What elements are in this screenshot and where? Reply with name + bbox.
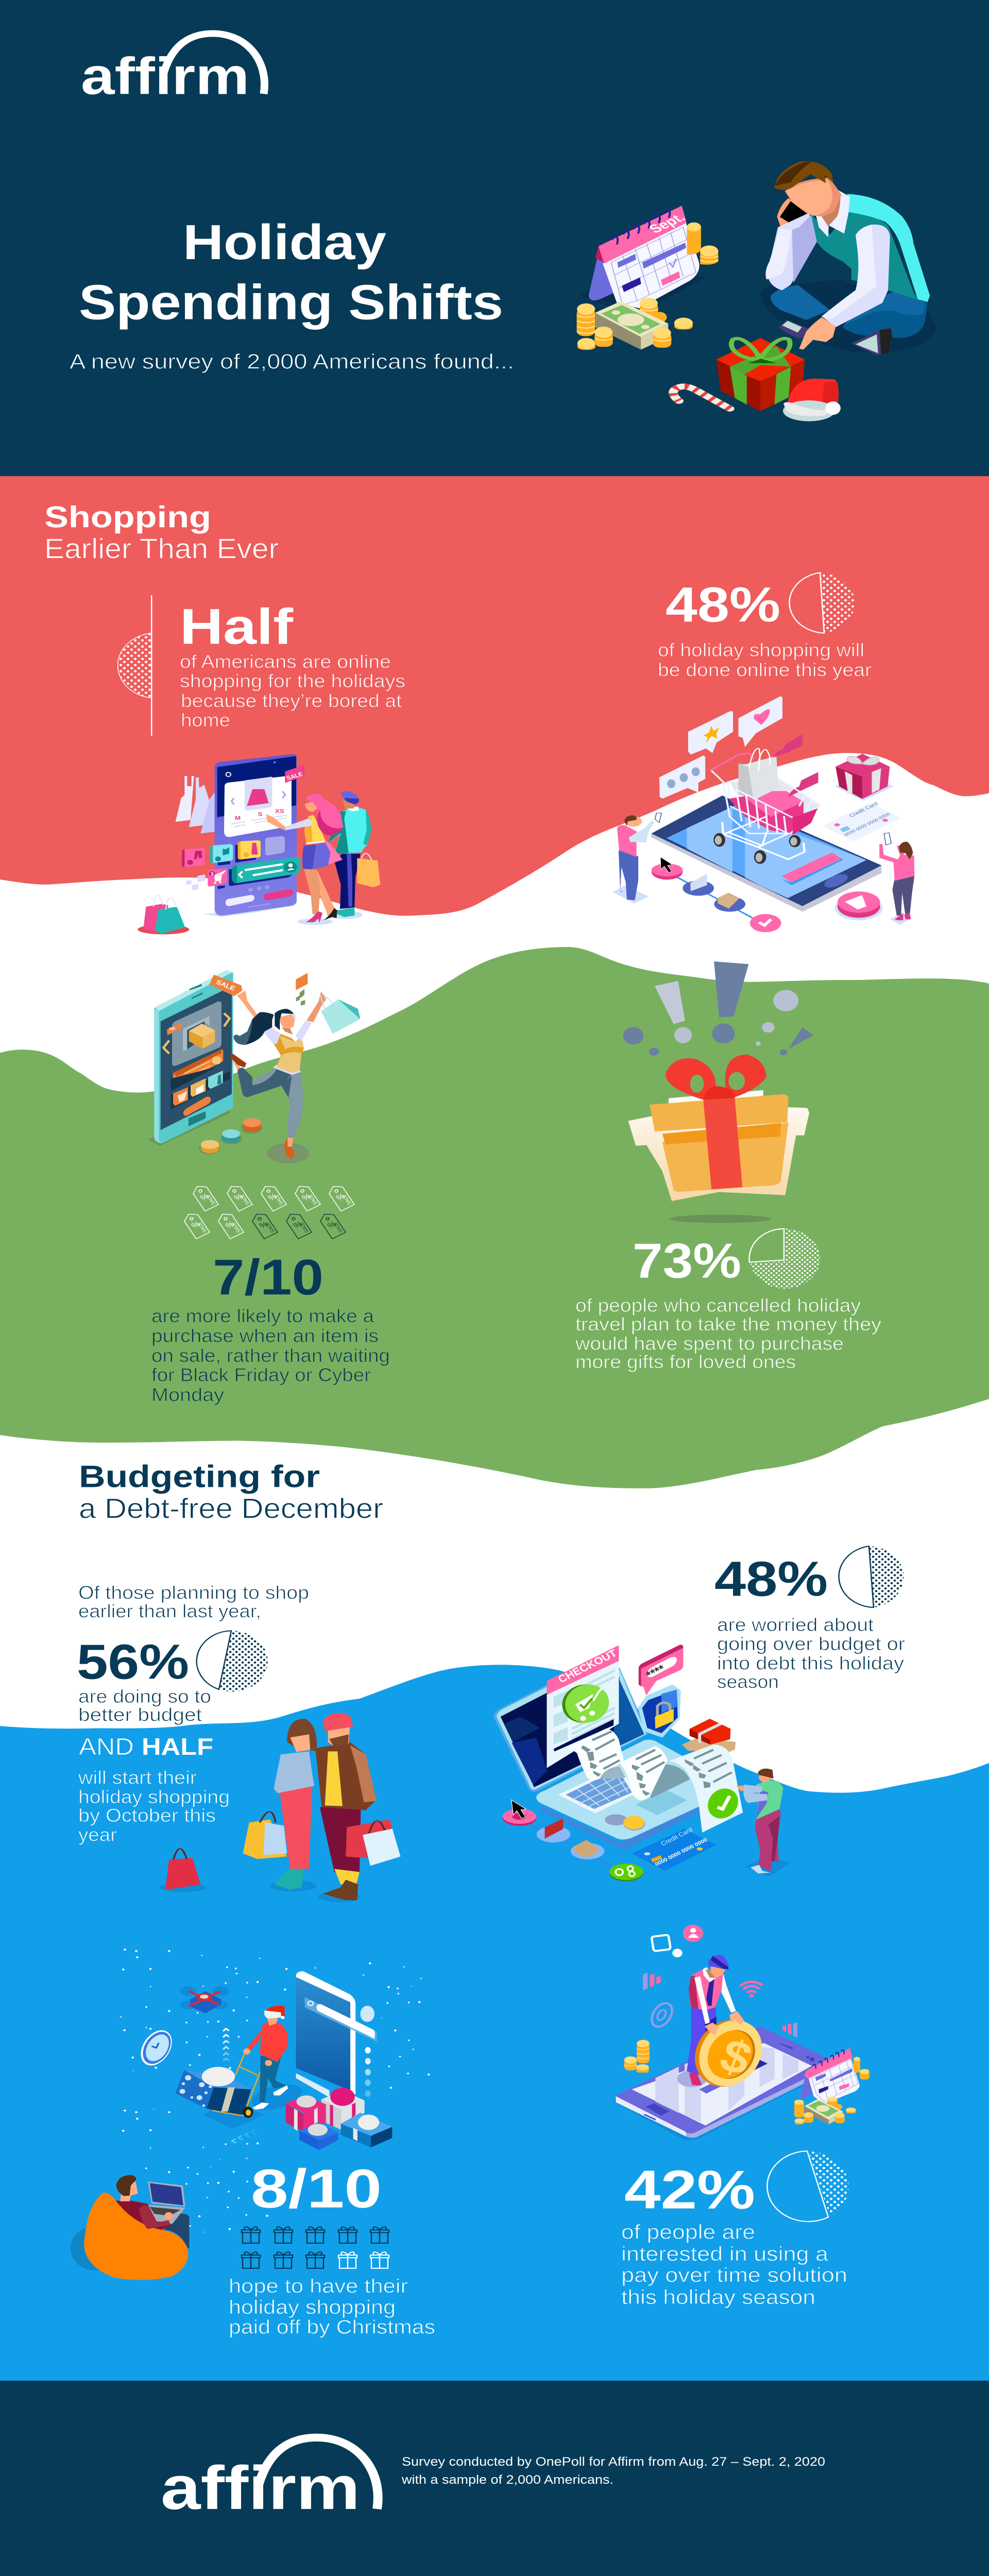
and half heading: AND [79, 1733, 134, 1760]
person in bean bag [71, 2175, 189, 2280]
header background [0, 0, 989, 476]
gift pile [286, 2088, 392, 2150]
clock [135, 2026, 178, 2070]
section heading: budgeting [79, 1459, 383, 1524]
48 percent text: be done online this year [658, 660, 872, 681]
section heading: shopping: Earlier Than Ever [44, 533, 279, 564]
sale tags: seven of ten: % [258, 1219, 270, 1230]
half text: of Americans are online [180, 652, 391, 672]
section heading: budgeting: a Debt-free December [79, 1493, 383, 1524]
73 percent text: more gifts for loved ones [575, 1352, 796, 1372]
section heading: shopping: Shopping [44, 501, 211, 534]
sale tags: seven of ten: SALE [298, 1222, 310, 1233]
woman shopper [266, 794, 343, 923]
48 percent text: are worried about [717, 1615, 874, 1635]
sale tags: seven of ten [182, 1183, 354, 1239]
and half stat [78, 1733, 230, 1845]
white wave [0, 753, 989, 1807]
calendar: Sept. [645, 211, 689, 235]
48 percent text [658, 640, 872, 681]
man with hand truck [175, 2006, 302, 2129]
man shopper [328, 791, 380, 917]
cursor, nodes and card [503, 1800, 717, 1882]
man shoes [779, 320, 892, 355]
credit card: Credit Card [848, 801, 879, 819]
8/10 text [229, 2275, 435, 2338]
title [79, 215, 503, 330]
and half text: by October this [78, 1806, 216, 1826]
and half text: holiday shopping [78, 1787, 230, 1807]
and half heading: HALF [142, 1733, 213, 1760]
man sleeves [765, 213, 890, 327]
calendar [579, 206, 709, 308]
42 percent text: of people are [621, 2221, 755, 2244]
8/10 stat [229, 2159, 435, 2338]
73 percent text: would have spent to purchase [575, 1334, 844, 1354]
56 percent text: better budget [78, 1705, 202, 1725]
app phone: M [235, 815, 241, 821]
man with phone [612, 813, 661, 903]
subtitle: A new survey of 2,000 Americans found... [70, 350, 514, 374]
password bubble and shield: **** [643, 1662, 668, 1681]
73 percent number: 73% [633, 1233, 741, 1289]
app phone [203, 754, 304, 917]
illustration: man moving gifts with phone and drone [71, 1948, 430, 2280]
73 percent stat [575, 1229, 881, 1372]
sale tags: seven of ten: % [232, 1192, 245, 1203]
illustration: shopping cart on phone [612, 697, 914, 932]
footer affirm logo: affirm [161, 2453, 360, 2522]
sale tags: seven of ten: % [300, 1192, 313, 1203]
7/10 text: on sale, rather than waiting [151, 1346, 390, 1366]
8/10 number: 8/10 [251, 2159, 382, 2219]
single red bag [160, 1849, 206, 1892]
48 percent text [717, 1615, 905, 1692]
56 percent stat [77, 1631, 268, 1725]
48 percent online stat [658, 573, 872, 681]
shadows under shoes [270, 1880, 360, 1902]
sale phone [148, 970, 308, 1146]
red section background [0, 476, 989, 917]
speech bubbles [659, 697, 782, 799]
gift shadow [670, 1215, 771, 1223]
7/10 text [151, 1306, 390, 1405]
footer survey note: Survey conducted by OnePoll for Affirm from Aug. 27 – Sept. 2, 2020 [402, 2454, 825, 2469]
coin stacks [577, 223, 718, 350]
7/10 text: for Black Friday or Cyber [151, 1365, 371, 1385]
cursor, nodes and card: Credit Card [659, 1826, 694, 1847]
checkout panel: CHECKOUT [556, 1648, 619, 1685]
illustration: phone shopping app with couple [138, 754, 380, 935]
pie chart 73 percent [749, 1229, 820, 1289]
pie chart 48 percent [839, 1546, 903, 1607]
shopping cart [710, 734, 820, 864]
48 percent number: 48% [714, 1552, 828, 1607]
8/10 text: hope to have their [229, 2275, 408, 2297]
sale tags: seven of ten: SALE [196, 1222, 208, 1233]
and half text [78, 1768, 230, 1845]
sale tags: seven of ten: % [334, 1192, 347, 1203]
phone in hand [777, 198, 806, 230]
sale tags: seven of ten: SALE [307, 1194, 318, 1206]
half text [180, 652, 405, 731]
sale tags: seven of ten: % [198, 1192, 211, 1203]
sale tags: seven of ten: SALE [341, 1194, 352, 1206]
42 percent stat [621, 2151, 848, 2309]
title: Spending Shifts [79, 275, 503, 330]
man legs [771, 285, 928, 338]
illustration: woman jumping with sale phone [148, 970, 360, 1164]
73 percent text: of people who cancelled holiday [575, 1296, 861, 1316]
48 percent debt stat [714, 1546, 905, 1692]
drone [180, 1986, 229, 2013]
sale tags: seven of ten: % [266, 1192, 279, 1203]
snow dots [120, 1948, 430, 2232]
intro text: planning to shop earlier: earlier than last year, [78, 1601, 261, 1622]
tall phone [296, 1971, 377, 2097]
48 percent text: of holiday shopping will [658, 640, 864, 660]
jumping woman [230, 991, 360, 1164]
phone [651, 795, 881, 912]
man with coin: $ [713, 2029, 759, 2085]
48 percent number: 48% [666, 578, 780, 633]
pie chart 42 percent [767, 2151, 848, 2222]
and half text: year [78, 1825, 117, 1845]
half text: because they’re bored at [181, 691, 402, 711]
73 percent text [575, 1296, 881, 1372]
green section background [0, 947, 989, 1488]
woman with phone [879, 833, 914, 925]
intro text: planning to shop earlier: Of those planning to shop [78, 1583, 309, 1603]
delivery box [682, 1719, 736, 1752]
candy cane [673, 386, 730, 409]
person at receipt [736, 1769, 790, 1877]
and half text: will start their [78, 1768, 197, 1788]
sale phone: % [168, 1025, 177, 1032]
head and collar [774, 161, 850, 237]
half stat [118, 595, 405, 736]
app phone: XS [275, 808, 284, 815]
pie chart 56 percent [197, 1631, 268, 1691]
sale tags: seven of ten: % [326, 1219, 338, 1230]
42 percent text: this holiday season [621, 2286, 815, 2309]
42 percent number: 42% [624, 2160, 755, 2220]
sale tags: seven of ten: SALE [332, 1222, 344, 1233]
section heading: shopping [44, 501, 279, 564]
calendar small [800, 2048, 860, 2104]
app tiles: 3 [211, 872, 214, 877]
intro text: planning to shop earlier [78, 1583, 309, 1622]
hanging clothes [176, 776, 215, 834]
gift icons: eight of ten [242, 2227, 389, 2268]
checkout panel [547, 1645, 619, 1768]
42 percent text: interested in using a [621, 2243, 828, 2265]
half text: shopping for the holidays [180, 671, 405, 691]
blue section background [0, 1665, 989, 2381]
48 percent text: season [717, 1672, 779, 1692]
affirm logo: affirm [81, 47, 249, 105]
42 percent text: pay over time solution [621, 2264, 847, 2286]
illustration: checkout laptop [493, 1645, 790, 1882]
half text: home [181, 710, 230, 731]
section heading: budgeting: Budgeting for [79, 1459, 320, 1494]
woman [243, 1719, 317, 1890]
sale tags: seven of ten: % [292, 1219, 304, 1230]
7/10 text: are more likely to make a [151, 1306, 374, 1327]
money [595, 301, 668, 350]
footer survey note: with a sample of 2,000 Americans. [401, 2472, 613, 2487]
shadows under couple [297, 911, 363, 925]
footer survey note [401, 2454, 825, 2487]
73 percent text: travel plan to take the money they [575, 1314, 881, 1335]
sale tags: seven of ten: SALE [264, 1222, 276, 1233]
sale tags: seven of ten: % [224, 1219, 236, 1230]
credit card [823, 801, 901, 841]
illustration: couple with shopping bags [160, 1713, 401, 1902]
illustration: man inserting coin into phone [613, 1925, 869, 2141]
chevron trails [223, 2029, 256, 2143]
vest [811, 194, 930, 302]
8/10 text: holiday shopping [229, 2296, 396, 2318]
sale tags: seven of ten: % [190, 1219, 202, 1230]
7/10 text: purchase when an item is [151, 1326, 379, 1346]
illustration: exploding gift [623, 961, 814, 1223]
app phone: SALE [285, 771, 304, 782]
coin stacks front [594, 327, 671, 348]
small coins [199, 1118, 262, 1155]
gift box [717, 338, 805, 411]
and half heading [79, 1733, 213, 1760]
sale tags: seven of ten: SALE [273, 1194, 284, 1206]
7/10 number: 7/10 [213, 1249, 323, 1306]
8/10 text: paid off by Christmas [229, 2316, 435, 2338]
floating icons [643, 1925, 797, 2038]
man with coin [684, 1955, 772, 2095]
gift box [628, 1055, 809, 1201]
app phone: S [258, 811, 263, 818]
coin phone [613, 2026, 826, 2141]
receipt paper [568, 1729, 743, 1833]
7/10 stat [151, 1249, 390, 1405]
sale phone: SALE [215, 978, 236, 992]
sale tags: seven of ten: SALE [239, 1194, 250, 1206]
half circle chart [118, 595, 152, 736]
gift [835, 754, 894, 801]
pointing hand [799, 317, 836, 350]
56 percent text [78, 1687, 211, 1725]
48 percent text: into debt this holiday [717, 1653, 904, 1674]
footer background [0, 2381, 989, 2576]
title: Holiday [183, 215, 386, 270]
laptop [493, 1668, 703, 1850]
man shadow [761, 279, 936, 352]
7/10 text: Monday [151, 1385, 224, 1405]
exclamation marks and dots [623, 961, 814, 1056]
pie chart 48 percent [790, 573, 855, 633]
half number: Half [180, 599, 294, 655]
sale tags: seven of ten: SALE [205, 1194, 216, 1206]
illustration: man on phone with calendar, money and gift [577, 161, 936, 421]
48 percent text: going over budget or [717, 1634, 905, 1654]
small shopping bags [138, 895, 189, 935]
56 percent number: 56% [77, 1635, 189, 1690]
password bubble and shield [638, 1645, 683, 1738]
credit card: 0000 0000 0000 0000 [843, 812, 892, 838]
56 percent text: are doing so to [78, 1687, 211, 1707]
small money and coins [624, 2040, 869, 2124]
santa hat [783, 379, 841, 421]
cursor, nodes and card: 0000 0000 0000 0000 [654, 1837, 709, 1868]
42 percent text [621, 2221, 847, 2309]
app tiles [182, 836, 300, 890]
man [315, 1713, 401, 1901]
sale tags: seven of ten: SALE [230, 1222, 242, 1233]
cursor and step nodes [652, 857, 882, 932]
